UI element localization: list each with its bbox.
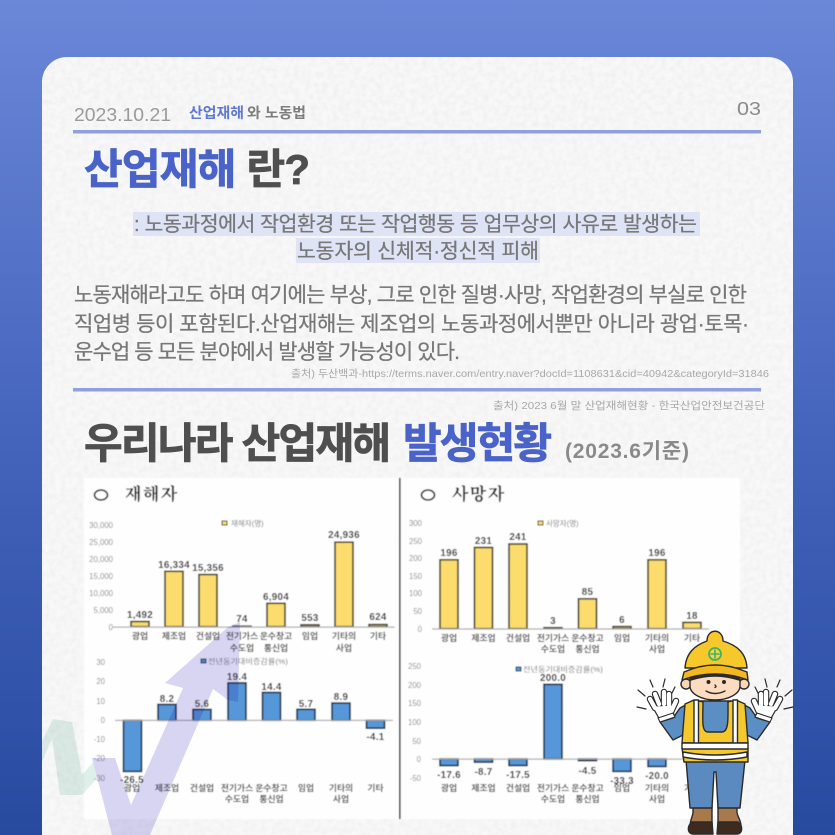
- page number: 03: [737, 98, 761, 119]
- chart: deaths year-on-year change: 수도업: [541, 793, 565, 804]
- chart: deaths year-on-year change: 250: [408, 662, 422, 671]
- chart: deaths year-on-year change: -33.3: [610, 776, 634, 787]
- definition callout: 노동자의 신체적·정신적 피해: [297, 240, 539, 263]
- chart: deaths by industry: 6: [619, 615, 625, 626]
- body text: 운수업 등 모든 분야에서 발생할 가능성이 있다.: [74, 341, 460, 364]
- chart: deaths by industry: 100: [409, 589, 423, 598]
- chart: injured by industry: 20,000: [89, 555, 114, 564]
- heading: current status: 발생현황: [403, 420, 552, 467]
- chart: deaths by industry: 231: [475, 536, 492, 547]
- chart: injured by industry: 74: [236, 614, 248, 625]
- chart: deaths by industry: 85: [582, 587, 593, 598]
- chart: deaths year-on-year change: 100: [408, 718, 422, 727]
- chart: injured year-on-year change: 10: [96, 697, 106, 706]
- chart: injured year-on-year change: -10: [94, 735, 106, 744]
- chart: deaths year-on-year change: -20.0: [645, 771, 669, 782]
- worker head: [681, 672, 749, 700]
- worker boots: [688, 806, 742, 834]
- definition callout: [133, 212, 700, 263]
- chart: deaths year-on-year change: 통신업: [575, 793, 600, 804]
- chart: deaths by industry: 건설업: [506, 632, 530, 643]
- chart: injured year-on-year change: 수도업: [225, 793, 249, 804]
- chart: deaths year-on-year change: 기타: [684, 782, 700, 793]
- chart: deaths by industry: 196: [440, 548, 458, 559]
- chart: deaths by industry: 전기가스: [537, 632, 569, 643]
- chart: injured year-on-year change: 제조업: [155, 782, 179, 793]
- chart: injured year-on-year change: 기타의: [329, 782, 353, 793]
- chart: deaths by industry: 통신업: [575, 643, 600, 654]
- worker arms: [660, 701, 770, 740]
- chart: injured year-on-year change: 기타: [367, 782, 384, 793]
- header: date and topic: 산업재해: [189, 105, 244, 122]
- chart: injured year-on-year change: 임업: [298, 782, 314, 793]
- chart: deaths year-on-year change: 전년동기대비증감률(%): [523, 664, 604, 674]
- chart: injured by industry: 임업: [302, 630, 318, 641]
- chart: injured by industry: 통신업: [264, 642, 288, 653]
- chart: injured by industry: 1,492: [127, 610, 153, 621]
- chart: injured year-on-year change: -4.1: [366, 732, 385, 743]
- header: date and topic: 와 노동법: [247, 105, 306, 122]
- header: date and topic: 2023.10.21: [74, 104, 171, 125]
- chart: deaths by industry: 200: [409, 554, 423, 563]
- chart: deaths by industry: 사업: [649, 643, 665, 654]
- chart: deaths year-on-year change: 제조업: [471, 782, 496, 793]
- chart: deaths year-on-year change: 기타의: [645, 782, 669, 793]
- chart: injured year-on-year change: -30: [94, 774, 106, 783]
- chart: injured by industry: 553: [301, 613, 319, 624]
- chart: injured year-on-year change: 통신업: [259, 793, 284, 804]
- chart: deaths by industry: 제조업: [471, 632, 496, 643]
- chart: injured by industry: 6,904: [263, 592, 289, 603]
- chart: injured year-on-year change: 사업: [333, 793, 349, 804]
- chart: deaths by industry: 사망자(명): [546, 518, 579, 528]
- heading: injured: 재해자: [125, 484, 179, 504]
- chart: deaths year-on-year change: -17.5: [506, 770, 530, 781]
- source note: statistics: 출처) 2023 6월 말 산업재해현황 - 한국산업안전보건공단: [493, 399, 765, 412]
- chart: injured year-on-year change: 14.4: [261, 682, 282, 693]
- chart: injured by industry: 건설업: [196, 630, 220, 641]
- chart: deaths by industry: 운수창고: [571, 632, 604, 643]
- chart: injured year-on-year change: 광업: [124, 782, 140, 793]
- chart: deaths year-on-year change: -8.7: [474, 767, 493, 778]
- chart: injured year-on-year change: 8.2: [160, 694, 175, 705]
- chart: deaths year-on-year change: 운수창고: [571, 782, 604, 793]
- chart: deaths by industry: 3: [550, 616, 556, 627]
- chart: injured by industry: 30,000: [89, 521, 114, 530]
- chart: injured year-on-year change: 건설업: [190, 782, 214, 793]
- chart: deaths year-on-year change: -50: [410, 774, 422, 783]
- header: date and topic: [74, 104, 306, 125]
- chart: deaths by industry: 기타: [684, 632, 700, 643]
- worker torso and vest: [682, 700, 748, 762]
- chart: deaths by industry: 광업: [441, 632, 457, 643]
- chart: injured year-on-year change: -20: [94, 754, 106, 763]
- chart: deaths by industry: 0: [418, 625, 423, 634]
- chart: deaths by industry: 18: [686, 611, 698, 622]
- chart: deaths by industry: 150: [409, 572, 423, 581]
- heading: deaths: 사망자: [452, 484, 506, 504]
- chart: deaths by industry: [409, 518, 709, 654]
- chart: deaths by industry: 250: [409, 537, 423, 546]
- definition callout: : 노동과정에서 작업환경 또는 작업행동 등 업무상의 사유로 발생하는: [134, 213, 697, 236]
- body text: 노동재해라고도 하며 여기에는 부상, 그로 인한 질병·사망, 작업환경의 부실로 인한: [74, 284, 747, 307]
- chart: deaths by industry: 기타의: [645, 632, 669, 643]
- chart: injured year-on-year change: 5.6: [195, 699, 210, 710]
- chart: injured year-on-year change: 전년동기대비증감률(%): [208, 656, 289, 666]
- chart: deaths year-on-year change: 사업: [649, 793, 665, 804]
- worker helmet: [682, 631, 748, 680]
- chart: deaths year-on-year change: -4.5: [578, 766, 597, 777]
- chart: injured by industry: 기타: [370, 630, 386, 641]
- heading: current status: 우리나라 산업재해: [84, 420, 391, 467]
- chart: deaths by industry: 196: [648, 548, 666, 559]
- chart: injured by industry: 0: [109, 623, 114, 632]
- chart: injured by industry: 24,936: [328, 530, 360, 541]
- chart: injured by industry: 25,000: [89, 538, 114, 547]
- icon: construction worker: [637, 631, 793, 834]
- chart: deaths by industry: 50: [413, 607, 423, 616]
- chart: injured year-on-year change: 20: [96, 677, 106, 686]
- chart: injured by industry: 16,334: [158, 560, 190, 571]
- chart: injured by industry: 15,000: [89, 572, 114, 581]
- chart: injured by industry: 수도업: [230, 642, 254, 653]
- heading: current status: [84, 420, 689, 467]
- chart: injured by industry: 제조업: [162, 630, 186, 641]
- chart: injured by industry: 10,000: [89, 589, 114, 598]
- body text: [74, 284, 749, 364]
- chart: injured by industry: 5,000: [93, 606, 114, 615]
- chart: deaths by industry: 임업: [614, 632, 630, 643]
- chart: injured by industry: 624: [369, 612, 387, 623]
- chart: deaths year-on-year change: 50: [412, 737, 422, 746]
- heading: current status: (2023.6기준): [565, 440, 689, 463]
- chart: deaths year-on-year change: 200: [408, 681, 422, 690]
- chart: injured by industry: 사업: [336, 642, 352, 653]
- heading: what is an industrial accident: 산업재해 란?: [84, 146, 310, 193]
- heading: injured: [94, 484, 179, 504]
- chart: deaths year-on-year change: 임업: [614, 782, 630, 793]
- chart: injured by industry: 재해자(명): [231, 518, 264, 528]
- heading: deaths: [422, 484, 506, 504]
- arrow: rising trend: [42, 622, 240, 835]
- chart: injured by industry: 광업: [132, 630, 148, 641]
- chart: deaths year-on-year change: 전기가스: [537, 782, 569, 793]
- chart: deaths by industry: 300: [409, 519, 423, 528]
- chart: deaths year-on-year change: -17.6: [437, 770, 461, 781]
- chart: injured by industry: [89, 518, 395, 653]
- chart: injured year-on-year change: 0: [101, 716, 106, 725]
- chart: deaths year-on-year change: 150: [408, 699, 422, 708]
- chart: injured year-on-year change: 8.9: [334, 692, 349, 703]
- source note: encyclopedia: 출처) 두산백과-https://terms.naver.com/entry.naver?docId=1108631&cid=40942&categoryId=31846: [291, 368, 769, 380]
- chart: injured year-on-year change: -26.5: [120, 775, 144, 786]
- chart: deaths by industry: 수도업: [541, 643, 565, 654]
- chart: deaths by industry: 241: [509, 532, 527, 543]
- chart: injured year-on-year change: 5.7: [299, 699, 314, 710]
- worker right glove: [754, 692, 780, 722]
- worker left glove: [650, 692, 676, 722]
- panel: chart sheet: [84, 478, 740, 819]
- chart: deaths year-on-year change: 광업: [441, 782, 457, 793]
- body text: 직업병 등이 포함된다.산업재해는 제조업의 노동과정에서뿐만 아니라 광업·토목·: [74, 313, 749, 336]
- chart: deaths year-on-year change: [408, 662, 709, 804]
- chart: deaths year-on-year change: 200.0: [540, 673, 566, 684]
- chart: injured year-on-year change: [94, 656, 393, 804]
- chart: injured by industry: 15,356: [192, 563, 224, 574]
- chart: injured year-on-year change: 30: [96, 658, 106, 667]
- worker trousers: [686, 760, 745, 808]
- chart: injured year-on-year change: 19.4: [227, 672, 247, 683]
- chart: deaths year-on-year change: 건설업: [506, 782, 530, 793]
- chart: deaths year-on-year change: 0: [417, 755, 422, 764]
- waving motion marks: [637, 679, 793, 709]
- chart: injured year-on-year change: 전기가스: [221, 782, 253, 793]
- chart: injured by industry: 운수창고: [260, 630, 292, 641]
- chart: injured by industry: 전기가스: [226, 630, 258, 641]
- chart: injured by industry: 기타의: [332, 630, 356, 641]
- chart: injured year-on-year change: 운수창고: [255, 782, 288, 793]
